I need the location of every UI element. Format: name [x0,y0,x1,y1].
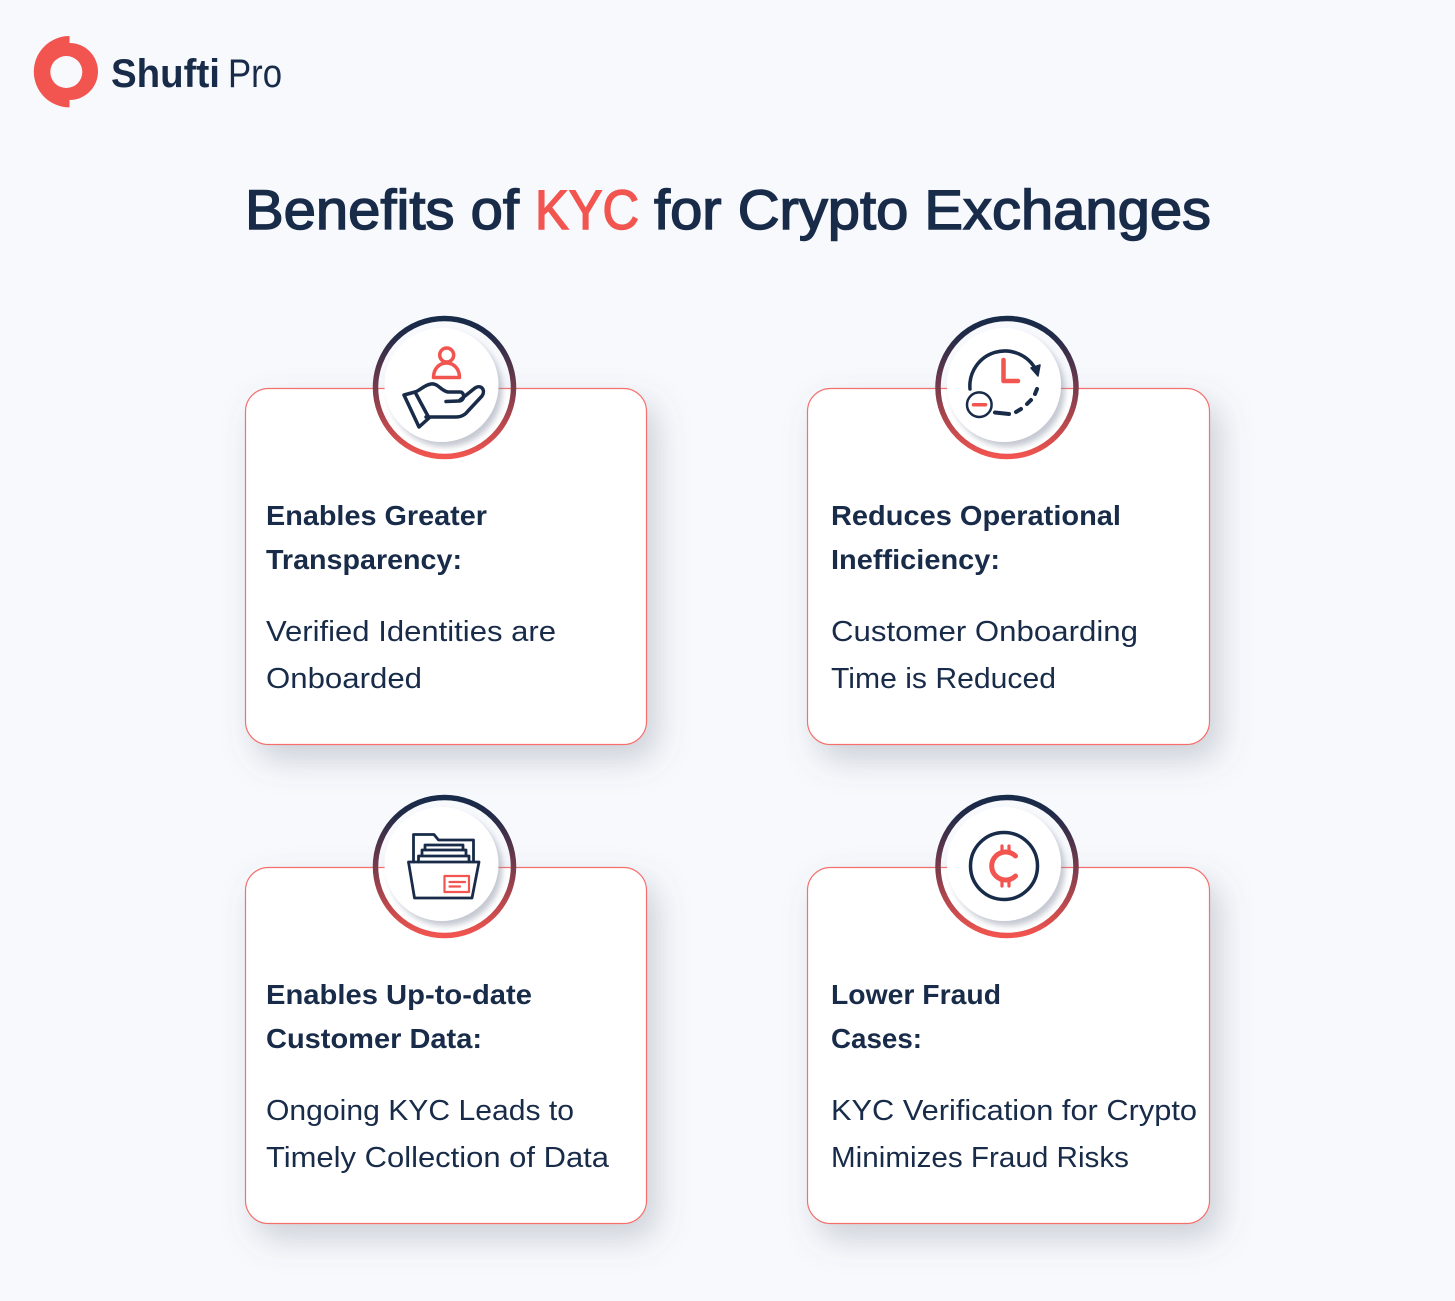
heading: Lower Fraud [831,979,1001,1010]
heading [266,500,487,575]
badge: clock icon [938,318,1076,456]
heading: Reduces Operational [831,500,1121,531]
icon: folder label [444,876,469,892]
icon: open hand [404,384,483,427]
heading: Enables Greater [266,500,487,531]
logo wordmark: Shufti [111,52,220,96]
card background [246,388,646,744]
logo: Shufti Pro [34,36,282,107]
body text: Onboarded [266,663,422,695]
body text [266,616,556,695]
card background [808,868,1210,1224]
icon: cedi symbol [992,846,1016,886]
icon: clock hands and minus [974,360,1018,405]
heading [831,979,1001,1054]
heading: Customer Data: [266,1023,482,1054]
icon: coin outline [970,832,1038,900]
badge: folder icon [376,798,514,936]
panel: Lower Fraud Cases [808,798,1210,1224]
heading: Enables Up-to-date [266,979,532,1010]
body text [831,616,1138,695]
heading [266,979,532,1054]
body text: Timely Collection of Data [266,1142,610,1174]
body text: KYC Verification for Crypto [831,1095,1197,1127]
logo wordmark: Pro [228,52,282,96]
panel: Enables Up-to-date Customer Data [246,798,646,1224]
icon: person [434,348,460,378]
panel: Enables Greater Transparency [246,318,646,744]
panel: Reduces Operational Inefficiency [808,318,1210,744]
icon: folder [408,834,479,898]
title: for Crypto Exchanges [654,178,1211,241]
body text: Customer Onboarding [831,616,1138,648]
badge: hand and person icon [376,318,514,456]
title: KYC [535,178,639,241]
card background [246,868,646,1224]
card background [808,388,1210,744]
body text: Minimizes Fraud Risks [831,1142,1129,1174]
icon: circular arrow [967,351,1040,417]
heading [831,500,1121,575]
body text: Ongoing KYC Leads to [266,1095,574,1127]
heading: Cases: [831,1023,922,1054]
title [245,178,1211,241]
title: Benefits of [245,178,519,241]
body text [831,1095,1197,1174]
heading: Transparency: [266,544,462,575]
logo wordmark [111,52,282,96]
body text [266,1095,610,1174]
heading: Inefficiency: [831,544,1000,575]
badge: crypto coin icon [938,798,1076,936]
body text: Verified Identities are [266,616,556,648]
body text: Time is Reduced [831,663,1056,695]
icon: logo ring [34,36,98,107]
